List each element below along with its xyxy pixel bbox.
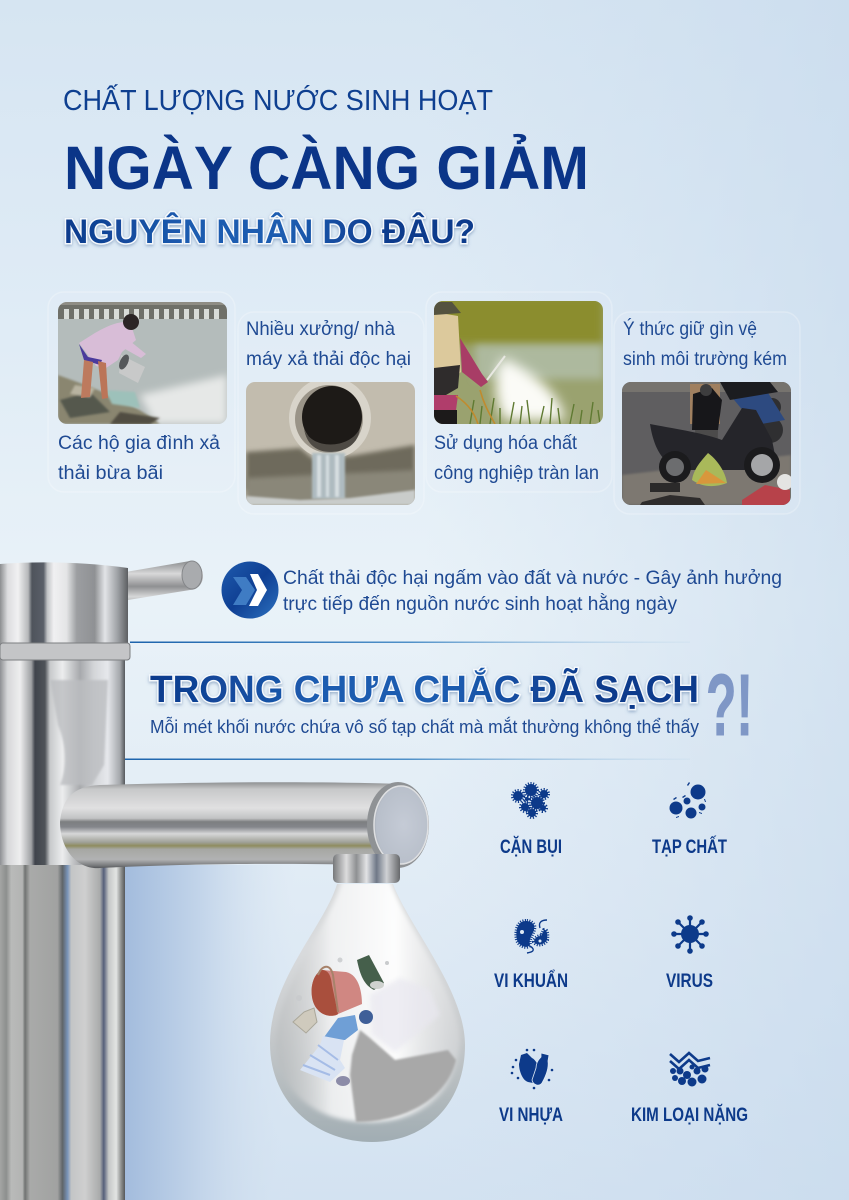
faucet: [0, 561, 429, 1200]
callout text: Chất thải độc hại ngấm vào đất và nước - Gây ảnh hưởng: [283, 568, 782, 589]
callout text: trực tiếp đến nguồn nước sinh hoạt hằng ngày: [283, 593, 677, 615]
photo: chemical spraying: [434, 296, 603, 424]
item: bacteria: [494, 920, 568, 992]
item: sediment: [500, 784, 562, 858]
can: [357, 955, 384, 990]
white scrap: [293, 1008, 317, 1033]
caption: household: [58, 433, 220, 484]
title line 1: CHẤT LƯỢNG NƯỚC SINH HOẠT: [63, 83, 493, 117]
caption: chemicals: [434, 433, 599, 484]
item: heavy metals: [631, 1053, 748, 1126]
faucet spout: [60, 782, 429, 868]
photo: household dumping: [58, 302, 227, 424]
bucket: [312, 970, 362, 1016]
title block: [63, 83, 589, 251]
icon: virus: [671, 915, 709, 954]
item: virus: [666, 915, 713, 992]
icon: metal particles: [670, 1053, 710, 1086]
gray sediment: [350, 1030, 456, 1122]
caption: factories: [246, 319, 411, 370]
item: impurities: [652, 782, 727, 858]
caption: household: Các hộ gia đình xả: [58, 433, 220, 454]
title line 2: NGÀY CÀNG GIẢM: [64, 134, 589, 202]
heading: clean-looking: [150, 657, 753, 754]
item: microplastics: [499, 1049, 563, 1126]
caption: awareness: [623, 319, 787, 370]
label: CẶN BỤI: [500, 836, 562, 858]
label: VI KHUẨN: [494, 970, 568, 992]
faucet handle: [85, 561, 203, 612]
panel: causes: [48, 292, 800, 514]
question mark and exclamation: ?!: [706, 657, 753, 754]
caption: household: thải bừa bãi: [58, 463, 163, 484]
faucet aerator: [333, 854, 400, 883]
faucet lower column: [0, 860, 125, 1200]
faucet body elbow: [50, 680, 108, 785]
caption: factories: Nhiều xưởng/ nhà: [246, 319, 395, 340]
photo: motorbike and trash: [622, 382, 793, 505]
panel: contaminants: [494, 782, 748, 1126]
icon: chevron button: [222, 562, 278, 618]
callout text: [283, 568, 782, 615]
water drop with debris: [270, 880, 465, 1142]
photo: drain pipe: [246, 377, 415, 505]
title question: NGUYÊN NHÂN DO ĐÂU?: [64, 213, 475, 251]
label: VI NHỰA: [499, 1105, 563, 1126]
icon: bacteria: [516, 920, 547, 953]
caption: awareness: Ý thức giữ gìn vệ: [623, 319, 757, 340]
label: KIM LOẠI NẶNG: [631, 1104, 748, 1126]
caption: chemicals: Sử dụng hóa chất: [434, 433, 578, 454]
callout: toxic waste: [222, 562, 782, 618]
card halos: [48, 292, 800, 514]
faucet collar: [0, 643, 130, 660]
icon: particles: [670, 782, 706, 818]
heading text: TRONG CHƯA CHẮC ĐÃ SẠCH: [150, 667, 699, 711]
icon: dust: [513, 784, 548, 817]
caption: factories: máy xả thải độc hại: [246, 349, 411, 370]
icon: plastic bottles: [511, 1049, 553, 1089]
caption: awareness: sinh môi trường kém: [623, 349, 787, 370]
faucet middle column: [0, 655, 125, 865]
bottle: [322, 1015, 358, 1040]
label: VIRUS: [666, 971, 713, 992]
caption: chemicals: công nghiệp tràn lan: [434, 463, 599, 484]
label: TẠP CHẤT: [652, 836, 727, 858]
subheading text: Mỗi mét khối nước chứa vô số tạp chất mà mắt thường không thể thấy: [150, 716, 700, 737]
faucet top cap: [0, 562, 128, 646]
